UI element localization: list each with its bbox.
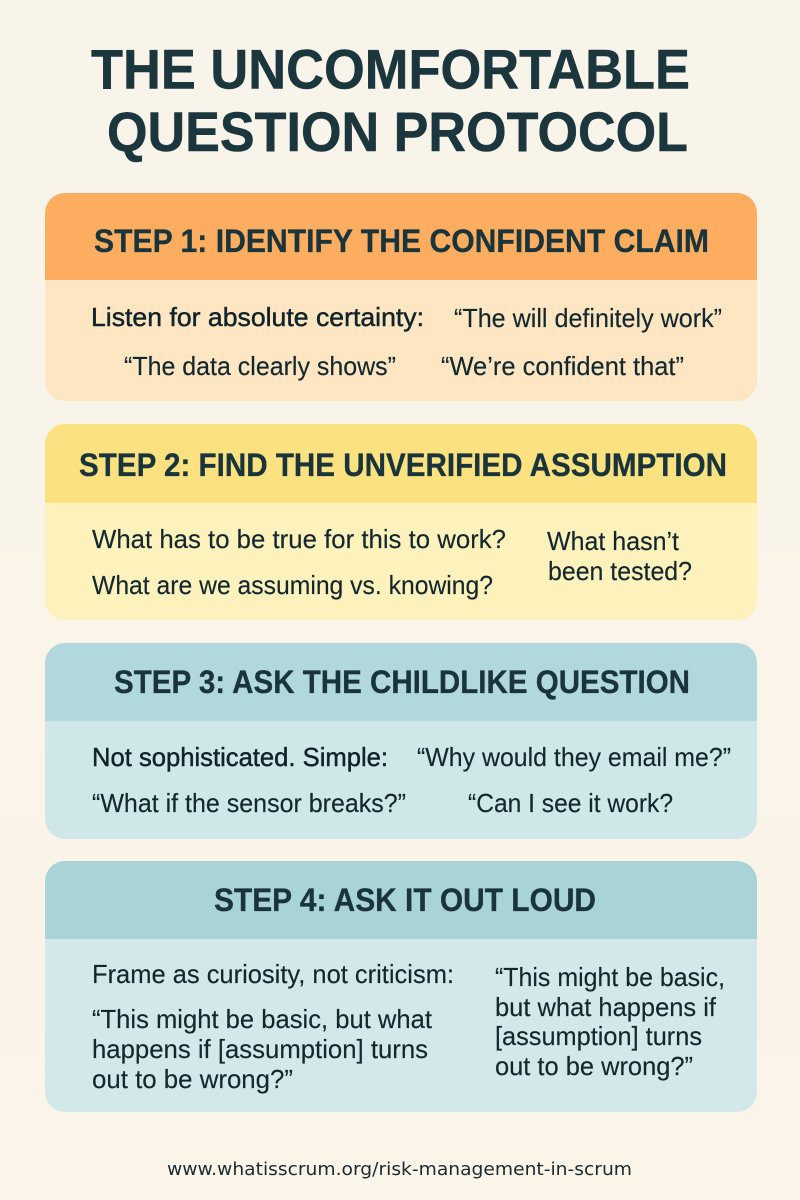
text: step 4 right column: out to be wrong?” — [495, 1051, 693, 1081]
panel: step 1 — [45, 193, 757, 401]
text: step 4 left column: happens if [assumption] turns — [92, 1034, 428, 1064]
text: step 3 body: “Can I see it work? — [468, 788, 673, 818]
title: THE UNCOMFORTABLE — [91, 38, 690, 100]
text: step 4 left column — [92, 959, 454, 1094]
text: step 1 body — [91, 302, 722, 381]
heading: step 2: STEP 2: FIND THE UNVERIFIED ASSUMPTION — [79, 447, 727, 483]
heading: step 4: STEP 4: ASK IT OUT LOUD — [214, 882, 596, 918]
text: step 2 body: What hasn’t — [547, 526, 680, 556]
heading: step 3: STEP 3: ASK THE CHILDLIKE QUESTION — [114, 664, 690, 700]
heading: step 1: STEP 1: IDENTIFY THE CONFIDENT CLAIM — [94, 223, 709, 259]
text: step 4 left column: out to be wrong?” — [92, 1064, 293, 1094]
text: step 2 body — [92, 524, 692, 600]
text: step 4 right column — [495, 962, 725, 1081]
title — [91, 38, 690, 163]
text: step 2 body: What has to be true for this to work? — [92, 524, 506, 554]
text: step 4 left column: Frame as curiosity, not criticism: — [92, 959, 454, 989]
footer url: www.whatisscrum.org/risk-management-in-scrum — [167, 1159, 632, 1180]
text: step 2 body: been tested? — [548, 556, 692, 586]
panel: step 4 — [45, 861, 757, 1112]
text: step 4 right column: but what happens if — [495, 992, 717, 1022]
text: step 2 body: What are we assuming vs. knowing? — [92, 570, 493, 600]
text: step 1 body: Listen for absolute certainty: — [91, 302, 424, 332]
text: step 3 body: Not sophisticated. Simple: — [92, 742, 388, 772]
text: step 1 body: “The will definitely work” — [454, 303, 722, 333]
text: step 4 right column: [assumption] turns — [495, 1021, 702, 1051]
text: step 3 body — [92, 742, 731, 818]
title: QUESTION PROTOCOL — [107, 100, 688, 163]
text: step 3 body: “Why would they email me?” — [417, 742, 731, 772]
panel: step 3 — [45, 643, 757, 839]
panel: step 2 — [45, 424, 757, 620]
text: step 1 body: “The data clearly shows” — [124, 351, 396, 381]
text: step 3 body: “What if the sensor breaks?” — [92, 788, 406, 818]
text: step 1 body: “We’re confident that” — [441, 351, 684, 381]
text: step 4 left column: “This might be basic, but what — [92, 1004, 433, 1034]
text: step 4 right column: “This might be basic, — [495, 962, 725, 992]
